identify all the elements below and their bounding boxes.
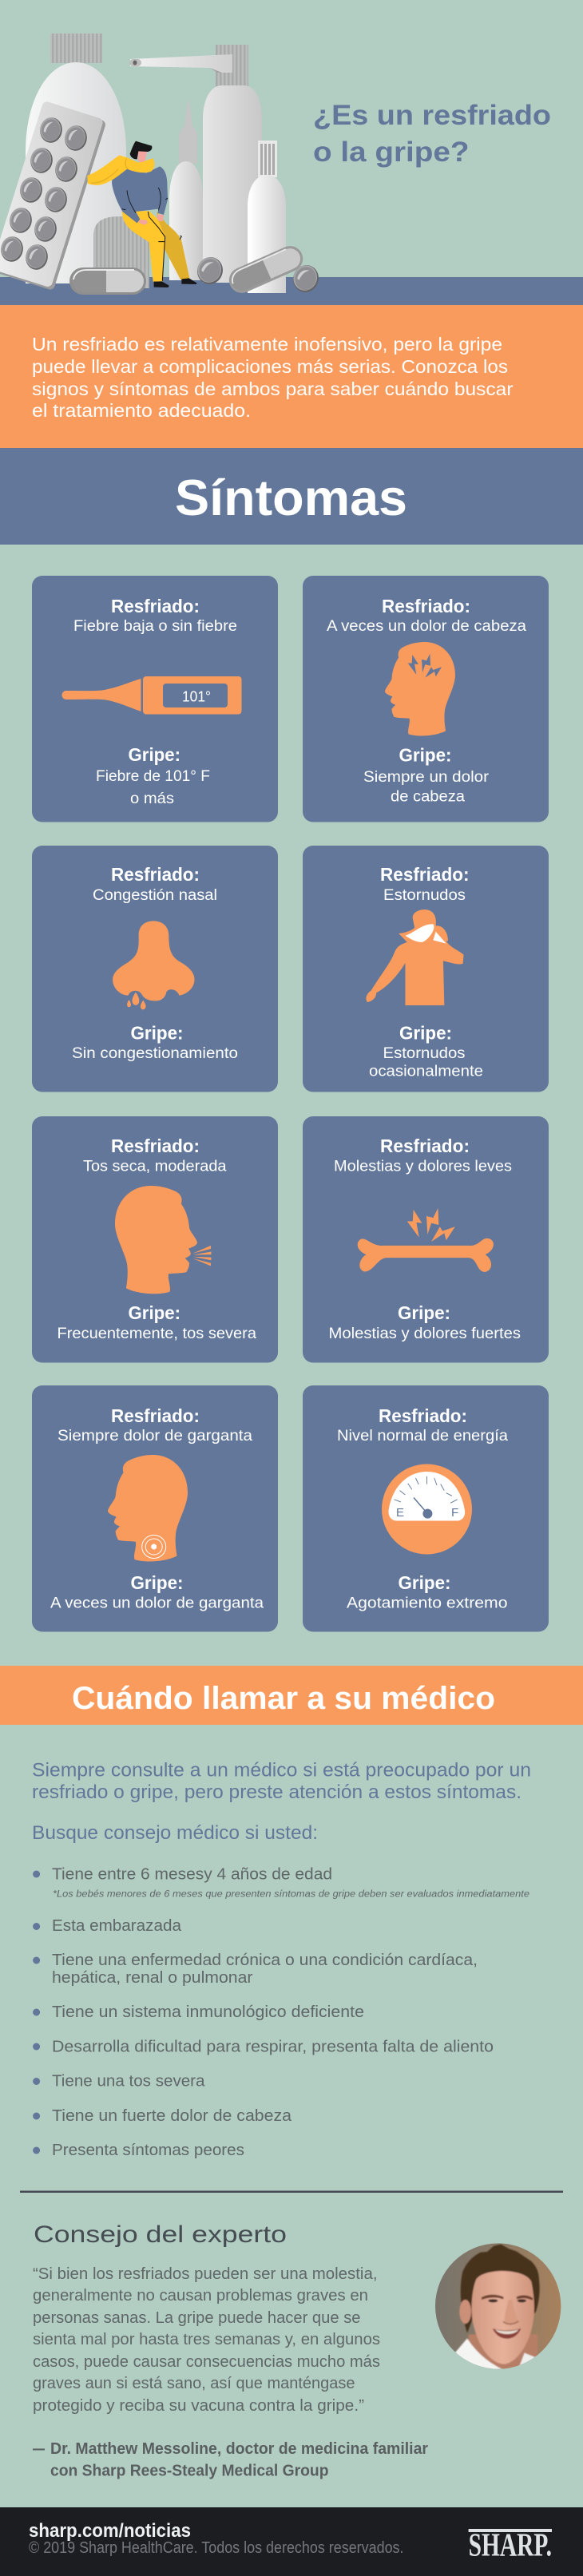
panel: aches xyxy=(303,1116,549,1362)
panel: headache: de cabeza xyxy=(391,789,465,805)
icon: aching bone xyxy=(358,1208,494,1272)
text block: attribution: — xyxy=(33,2440,45,2458)
panel: sneezing: Estornudos xyxy=(383,1045,465,1062)
panel: energy xyxy=(303,1385,549,1632)
panel: intro: puede llevar a complicaciones más serias. Conozca los xyxy=(32,356,508,377)
footer link: sharp.com/noticias xyxy=(29,2520,191,2542)
panel: headache xyxy=(303,576,549,822)
list: reasons to seek advice: Tiene una enfermedad crónica o una condición cardíaca, xyxy=(52,1952,478,1969)
heading: Síntomas xyxy=(0,448,583,545)
list: reasons to seek advice xyxy=(33,1865,529,2159)
icon: head coughing xyxy=(115,1186,211,1294)
panel: aches: Gripe: xyxy=(398,1302,450,1323)
panel: fever: Resfriado: xyxy=(111,596,200,616)
text block: attribution: con Sharp Rees-Stealy Medical Group xyxy=(50,2463,329,2480)
panel: intro: signos y síntomas de ambos para saber cuándo buscar xyxy=(32,378,514,399)
panel: nasal congestion: Sin congestionamiento xyxy=(72,1045,238,1062)
heading: when to call the doctor: Cuándo llamar a su médico xyxy=(72,1681,495,1716)
text block: doctor intro: Busque consejo médico si usted: xyxy=(32,1822,318,1844)
small white bottle xyxy=(248,141,286,293)
icon: thermometer: 101° xyxy=(182,688,211,704)
panel: fever: Gripe: xyxy=(128,744,180,765)
panel: nasal congestion: Gripe: xyxy=(131,1022,184,1043)
icon: fuel gauge: F xyxy=(451,1506,458,1520)
panel: sore throat: Siempre dolor de garganta xyxy=(58,1428,252,1445)
title xyxy=(313,100,551,168)
panel: sneezing: Resfriado: xyxy=(380,864,470,885)
blister pack xyxy=(0,101,106,291)
panel: sore throat xyxy=(32,1385,278,1632)
panel: aches: Resfriado: xyxy=(380,1135,470,1156)
panel: energy: Resfriado: xyxy=(379,1405,467,1426)
large bottle xyxy=(26,34,126,283)
heading: expert advice: Consejo del experto xyxy=(34,2221,287,2248)
text block: doctor intro: Siempre consulte a un médico si está preocupado por un xyxy=(32,1760,531,1781)
list: reasons to seek advice: Tiene entre 6 mesesy 4 años de edad xyxy=(52,1865,332,1883)
panel: intro xyxy=(0,305,583,448)
spray bottle xyxy=(129,45,262,283)
icon: head with sore throat xyxy=(108,1455,188,1561)
panel: aches: Molestias y dolores fuertes xyxy=(329,1326,521,1342)
panel: cough xyxy=(32,1116,278,1362)
panel: headache: Siempre un dolor xyxy=(363,769,490,786)
panel: cough: Tos seca, moderada xyxy=(83,1158,227,1175)
panel: nasal congestion: Congestión nasal xyxy=(93,887,217,904)
panel: sore throat: A veces un dolor de garganta xyxy=(50,1595,264,1611)
text block: expert quote: casos, puede causar consecuencias mucho más xyxy=(33,2353,380,2371)
text block: doctor intro xyxy=(32,1760,531,1844)
ground band xyxy=(0,277,583,305)
copyright: © 2019 Sharp HealthCare. Todos los derechos reservados. xyxy=(29,2539,404,2557)
panel: aches: Molestias y dolores leves xyxy=(334,1158,512,1175)
text block: expert quote: protegido y reciba su vacuna contra la gripe.” xyxy=(33,2397,364,2415)
list: reasons to seek advice: Tiene un sistema inmunológico deficiente xyxy=(52,2003,364,2021)
text block: expert quote: personas sanas. La gripe puede hacer que se xyxy=(33,2309,360,2327)
panel: fever xyxy=(32,576,278,822)
panel: sneezing xyxy=(303,846,549,1092)
icon: person sneezing xyxy=(366,910,464,1005)
panel: sneezing: Estornudos xyxy=(383,887,466,904)
list: reasons to seek advice: Presenta síntomas peores xyxy=(52,2142,244,2159)
round pill right xyxy=(290,262,322,295)
heading: when to call the doctor xyxy=(0,1666,583,1725)
list: reasons to seek advice: Esta embarazada xyxy=(52,1917,182,1935)
text block: doctor intro: resfriado o gripe, pero preste atención a estos síntomas. xyxy=(32,1781,522,1803)
logo: Sharp: SHARP. xyxy=(469,2526,552,2563)
text block: expert quote xyxy=(33,2265,380,2415)
capsule, horizontal xyxy=(69,268,146,295)
photo: doctor portrait xyxy=(435,2243,561,2369)
text block: expert quote: “Si bien los resfriados pueden ser una molestia, xyxy=(33,2265,377,2283)
panel: energy: Gripe: xyxy=(398,1572,450,1593)
title: o la gripe? xyxy=(313,137,470,168)
heading: Síntomas: Síntomas xyxy=(175,470,407,526)
panel: energy: Nivel normal de energía xyxy=(337,1428,508,1445)
panel: fever: o más xyxy=(130,791,174,807)
list: reasons to seek advice: hepática, renal o pulmonar xyxy=(52,1969,253,1987)
icon: fuel gauge: E xyxy=(396,1506,404,1520)
panel: sneezing: ocasionalmente xyxy=(369,1064,483,1080)
panel: nasal congestion: Resfriado: xyxy=(111,864,200,885)
panel: fever: Fiebre de 101° F xyxy=(96,768,210,785)
text block: expert quote: graves aun si está sano, así que manténgase xyxy=(33,2375,355,2392)
panel: intro: Un resfriado es relativamente inofensivo, pero la gripe xyxy=(32,334,502,355)
list: reasons to seek advice: *Los bebés menores de 6 meses que presenten síntomas de gripe deben ser evaluados inmediatamente xyxy=(53,1888,529,1899)
panel: sore throat: Gripe: xyxy=(131,1572,184,1593)
capsule, tilted xyxy=(225,242,307,297)
header illustration: medicine and sick person xyxy=(0,34,583,305)
icon: nose xyxy=(113,921,194,1009)
panel: headache: Resfriado: xyxy=(382,596,470,616)
person with scarf xyxy=(87,141,197,287)
icon: fuel gauge xyxy=(382,1464,472,1554)
squat bottle behind person xyxy=(93,216,149,288)
icon: head with headache xyxy=(385,642,455,736)
panel: energy: Agotamiento extremo xyxy=(347,1595,508,1611)
panel: fever: Fiebre baja o sin fiebre xyxy=(73,618,237,635)
text block: attribution xyxy=(33,2440,428,2480)
panel: headache: Gripe: xyxy=(399,744,452,765)
panel: nasal congestion xyxy=(32,846,278,1092)
text block: attribution: Dr. Matthew Messoline, doctor de medicina familiar xyxy=(50,2440,428,2458)
icon: thermometer xyxy=(62,676,242,714)
panel: intro: el tratamiento adecuado. xyxy=(32,400,251,421)
small back bottle xyxy=(169,100,203,280)
list: reasons to seek advice: Desarrolla dificultad para respirar, presenta falta de aliento xyxy=(52,2038,494,2055)
panel: cough: Resfriado: xyxy=(111,1135,200,1156)
list: reasons to seek advice: Tiene un fuerte dolor de cabeza xyxy=(52,2107,292,2125)
panel: sore throat: Resfriado: xyxy=(111,1405,200,1426)
footer xyxy=(0,2507,583,2576)
panel: headache: A veces un dolor de cabeza xyxy=(327,618,526,635)
list: reasons to seek advice: Tiene una tos severa xyxy=(52,2073,205,2091)
panel: cough: Gripe: xyxy=(128,1302,180,1323)
text block: expert quote: sienta mal por hasta tres semanas y, en algunos xyxy=(33,2331,380,2348)
title: ¿Es un resfriado xyxy=(313,100,551,131)
round pill on ground xyxy=(194,254,226,287)
panel: sneezing: Gripe: xyxy=(399,1022,452,1043)
text block: expert quote: generalmente no causan problemas graves en xyxy=(33,2287,368,2305)
panel: cough: Frecuentemente, tos severa xyxy=(58,1326,256,1342)
